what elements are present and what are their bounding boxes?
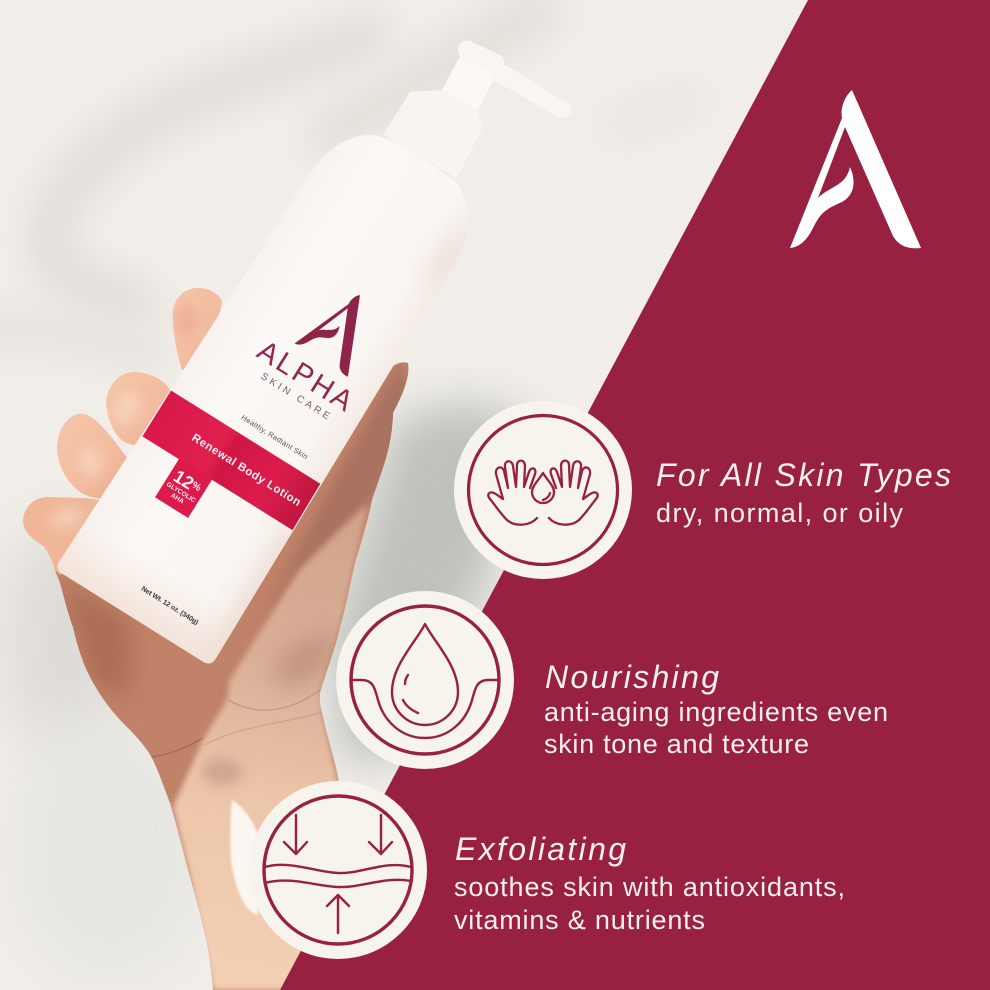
red label band [119, 391, 321, 568]
benefit: for all skin types [656, 457, 951, 528]
12 percent callout: % [190, 480, 203, 494]
fingertip flush [177, 304, 195, 336]
benefit: nourishing: anti-aging ingredients even [544, 697, 888, 727]
12 percent callout [161, 465, 207, 511]
icon badge: hands and drop [454, 401, 632, 579]
benefit: exfoliating: soothes skin with antioxidants, [454, 872, 845, 902]
pump collar [383, 90, 483, 178]
product name: Renewal Body Lotion [189, 432, 303, 509]
fingertip highlights [46, 387, 145, 531]
12 percent callout: AHA [169, 492, 185, 506]
benefit: exfoliating: vitamins & nutrients [454, 905, 705, 935]
pump head [458, 40, 504, 76]
pump neck [442, 56, 497, 112]
finger: little [23, 497, 100, 575]
bottle logo mark [294, 279, 388, 377]
brand wordmark: ALPHA [251, 335, 359, 418]
finger: index [173, 288, 222, 380]
icon badge: nourishing drop [336, 591, 514, 769]
benefit: nourishing: Nourishing [545, 659, 719, 695]
finger: ring [57, 414, 130, 502]
benefit: exfoliating [454, 831, 845, 935]
palm and forearm [55, 362, 408, 990]
icon badge: exfoliating skin layers [249, 781, 427, 959]
benefit: for all skin types: For All Skin Types [656, 457, 951, 493]
net weight: Net Wt. 12 oz. (340g) [140, 586, 199, 626]
benefit: for all skin types: dry, normal, or oily [656, 498, 904, 528]
benefit: exfoliating: Exfoliating [455, 831, 626, 867]
product bottle [58, 135, 466, 664]
12 percent callout: 12 [170, 466, 197, 494]
bottle shading [49, 138, 487, 673]
bottle body [55, 109, 499, 667]
12 percent callout: GLYCOLIC [165, 481, 197, 505]
benefit: nourishing [544, 659, 888, 759]
benefit: nourishing: skin tone and texture [544, 729, 809, 759]
pump spout [492, 60, 572, 118]
brand subline: SKIN CARE [259, 371, 332, 422]
brand logo: white A [790, 90, 921, 248]
tagline: Healthy, Radiant Skin [240, 413, 310, 461]
finger: middle [106, 372, 175, 450]
bottle pump [383, 40, 572, 178]
burgundy diagonal panel [280, 0, 990, 990]
lotion smear on the wrist [230, 800, 258, 915]
hand shading [60, 360, 420, 990]
hand and arm holding the bottle [23, 288, 420, 990]
